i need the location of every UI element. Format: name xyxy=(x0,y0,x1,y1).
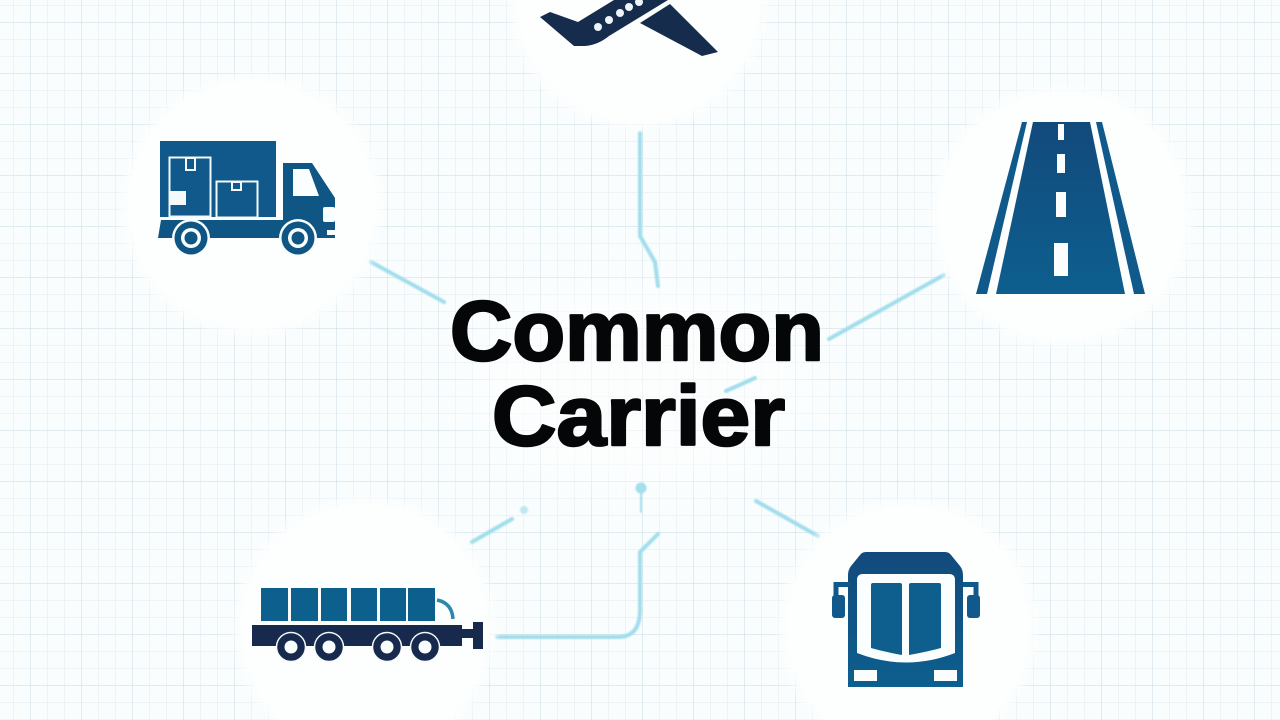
connector: bus to title xyxy=(756,501,818,536)
connector: centre node dot xyxy=(636,482,646,494)
title xyxy=(450,284,824,463)
icon: flatbed trailer with cargo xyxy=(252,588,483,662)
connector: air to title xyxy=(640,133,658,286)
title line 2: Carrier xyxy=(492,369,785,463)
panel: trailer circle xyxy=(229,492,501,720)
icon: bus front xyxy=(832,552,980,687)
central glow behind title xyxy=(470,280,810,490)
icon: delivery truck xyxy=(158,141,337,257)
connector: trailer elbow xyxy=(497,534,658,637)
connector: centre node xyxy=(640,488,642,512)
connector lines xyxy=(371,133,944,637)
connector: road to title xyxy=(829,275,944,339)
title line 1: Common xyxy=(450,284,824,378)
icon: airplane xyxy=(540,0,718,56)
panel: truck circle xyxy=(116,69,388,341)
icon: highway xyxy=(976,122,1145,294)
connector: road inner segment xyxy=(726,378,755,391)
connector: trailer to title xyxy=(472,519,512,542)
connector: trailer dot xyxy=(520,506,528,514)
panel: air circle xyxy=(504,0,772,134)
panel: bus circle xyxy=(774,494,1042,720)
panel: road circle xyxy=(926,80,1198,352)
connector: truck to title xyxy=(371,262,444,302)
